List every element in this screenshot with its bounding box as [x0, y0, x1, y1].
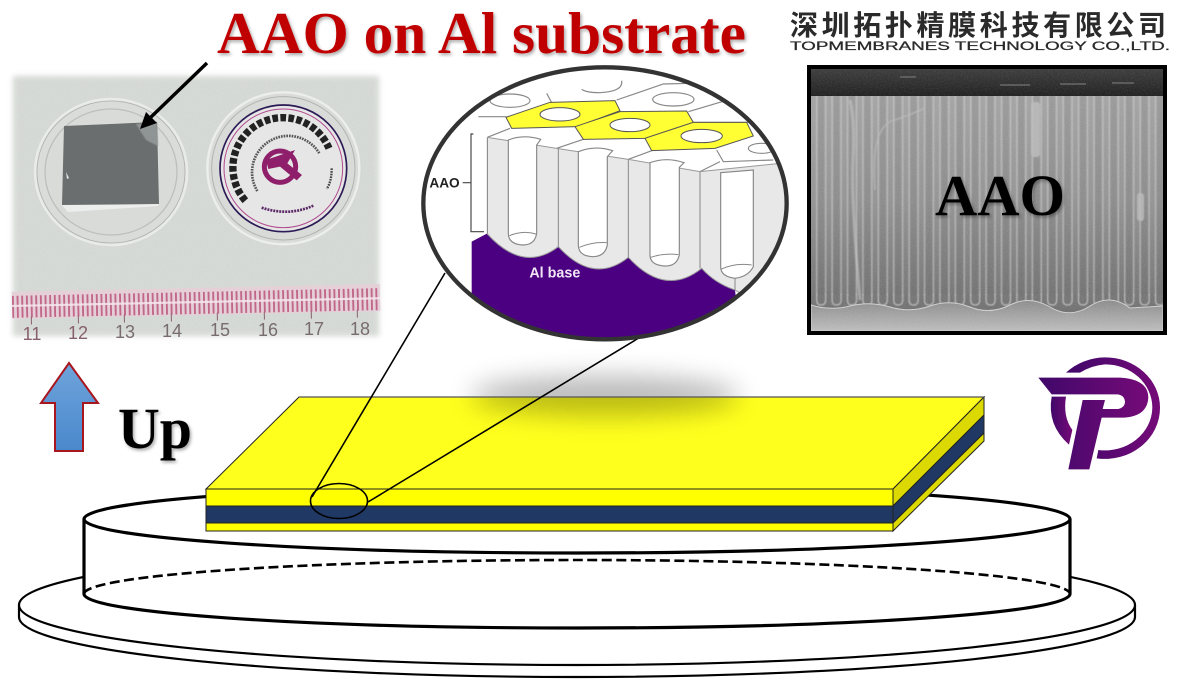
AAO sample square	[62, 122, 159, 206]
slab front face layers	[206, 489, 893, 506]
soft shadow beneath magnified view	[470, 376, 740, 416]
logo letter P	[1038, 378, 1148, 469]
lid printed lettering	[233, 118, 329, 201]
white outer wall	[486, 136, 488, 234]
ruler: 15	[210, 320, 230, 340]
ruler: 16	[258, 320, 278, 340]
lid emblem	[264, 151, 296, 182]
purple Al base	[472, 234, 736, 338]
grey pore walls	[486, 137, 784, 293]
ruler: 13	[115, 322, 135, 342]
cylinder stage	[84, 485, 1070, 628]
ruler: 11	[23, 324, 41, 344]
magnifier ring	[423, 67, 787, 339]
Al base label: Al base	[529, 265, 580, 281]
AAO label: AAO	[429, 176, 460, 191]
photo: AAO sample in petri dishes with ruler	[12, 76, 380, 344]
logo ring right arc	[1066, 357, 1160, 459]
pores	[508, 137, 753, 278]
SEM cross-section image	[807, 65, 1167, 335]
ruler	[12, 284, 380, 344]
Up label: Up	[118, 396, 192, 461]
petri dish: sample	[35, 99, 187, 245]
slab top face	[206, 397, 984, 489]
ruler: 18	[350, 319, 370, 339]
SEM top dark band	[811, 69, 1163, 96]
yellow top hexagons	[506, 101, 753, 151]
base disc	[19, 545, 1135, 677]
company name logotype: 深圳拓扑精膜科技有限公司	[790, 4, 1166, 44]
SEM aluminium base	[811, 300, 1163, 331]
background honeycomb lines	[478, 81, 775, 172]
photo background	[13, 76, 379, 336]
title: AAO on Al substrate	[217, 0, 746, 66]
zoom leader lines and sampled region	[310, 273, 642, 518]
arrow: title to sample	[140, 63, 207, 129]
brand logo P	[1038, 357, 1160, 469]
logo ring left arc	[1051, 397, 1072, 445]
magnified AAO structure	[423, 67, 787, 360]
layered AAO/Al slab	[206, 397, 984, 531]
company name logotype: TOPMEMBRANES TECHNOLOGY CO.,LTD.	[790, 41, 1170, 53]
SEM label: AAO	[935, 163, 1065, 228]
slab side face	[893, 397, 984, 506]
petri dish: labelled lid	[207, 92, 359, 244]
ruler: 14	[162, 321, 182, 341]
AAO bracket	[463, 134, 484, 232]
ruler: 12	[68, 323, 88, 343]
up arrow	[41, 363, 98, 451]
ruler: 17	[304, 319, 324, 339]
